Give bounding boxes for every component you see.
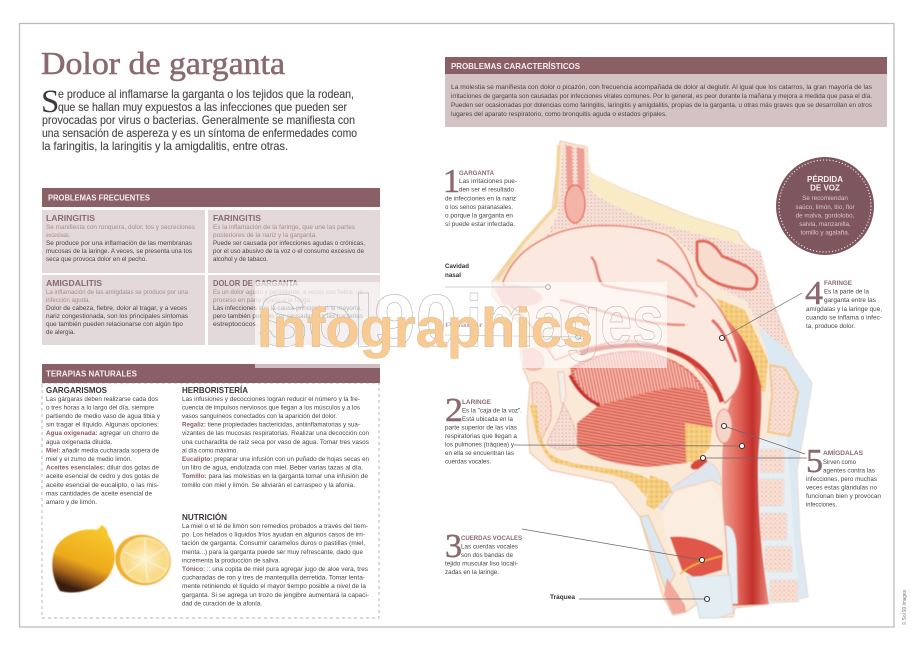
arytenoid band bbox=[725, 525, 738, 604]
text: nutrición: incrementa la producción de saliva. bbox=[182, 557, 280, 564]
text: gargarismos: sin tragar el líquido. Algunas opciones: bbox=[46, 422, 159, 429]
larynx cavity bbox=[662, 482, 723, 575]
text: herboristería: tomillo con miel y limón. Se aliviarán el carraspeo y la afonía. bbox=[182, 482, 355, 489]
teeth bbox=[558, 372, 566, 403]
callout: 4 faringe: garganta entre las bbox=[824, 297, 877, 304]
title: Dolor de garganta bbox=[41, 45, 285, 81]
callout: 1 garganta: den ser el resultado bbox=[459, 187, 514, 194]
callout: 3 cuerdas vocales: CUERDAS VOCALES bbox=[461, 535, 523, 542]
card: dolor de garganta: Las infecciones son la causa principal en la mayoría, bbox=[213, 305, 362, 312]
label: cavidad nasal bbox=[445, 263, 550, 289]
label: tráquea bbox=[550, 594, 710, 602]
circle: pérdida de voz: tomillo y agalaña. bbox=[800, 230, 850, 236]
card: faringitis bbox=[208, 210, 380, 273]
text: nutrición bbox=[182, 511, 369, 607]
callout: 3 cuerdas vocales: zadas en la laringe. bbox=[445, 569, 499, 576]
text box background bbox=[445, 74, 887, 127]
callout: 5 amígdalas: Sirven como bbox=[823, 459, 856, 466]
spine base strip bbox=[756, 436, 800, 604]
heading bar: terapias naturales: TERAPIAS NATURALES bbox=[46, 368, 137, 378]
thyroid cartilage bbox=[640, 515, 675, 590]
body text: lugares del aparato respiratorio, como bronquitis aguda o estados gripales. bbox=[451, 111, 667, 118]
card: amigdalitis: que también pueden relacionarse con algún tipo bbox=[46, 321, 183, 328]
epiglottis bbox=[655, 462, 721, 510]
circle: pérdida de voz: DE VOZ bbox=[810, 184, 840, 192]
text: nutrición: La miel o el té de limón son remedios probados a través del tiem- bbox=[182, 523, 368, 530]
oral cavity tongue bbox=[570, 350, 713, 467]
watermark: images bbox=[466, 281, 664, 362]
red lingual tonsil bbox=[689, 456, 709, 472]
callout: 5 amígdalas: infecciones, pero muchas bbox=[806, 476, 878, 483]
text: nutrición: garganta. Si se agrega un trozo de jengibre aumentará la capaci- bbox=[182, 592, 369, 599]
text: gargarismos: Agua oxigenada: agregar un chorro de bbox=[46, 430, 159, 437]
callout: 1 garganta: o porque la garganta en bbox=[445, 213, 513, 220]
frontal sinus bbox=[565, 185, 585, 223]
lower turbinate fold bbox=[560, 300, 685, 325]
lips bbox=[523, 348, 544, 370]
callout: 2 laringe bbox=[445, 392, 744, 466]
callout: 1 garganta: 1 bbox=[443, 163, 460, 200]
callout: 2 laringe: los pulmones (tráquea) y bbox=[445, 442, 515, 449]
callout: 3 cuerdas vocales: 3 bbox=[445, 528, 462, 565]
text: herboristería: HERBORISTERÍA bbox=[182, 384, 248, 395]
text: gargarismos: o tres horas a lo largo del día, siempre bbox=[46, 404, 154, 412]
vocal cords bbox=[670, 537, 723, 578]
heading bar: problemas frecuentes bbox=[42, 188, 380, 207]
callout: 2 laringe: LARINGE bbox=[462, 399, 492, 406]
panel: problemas frecuentes bbox=[42, 188, 380, 345]
jaw bone bbox=[547, 403, 577, 450]
text: gargarismos: partiendo de medio vaso de agua tibia y bbox=[46, 413, 161, 420]
body text: irritaciones de garganta son causadas por infecciones virales comunes. Por lo general, es peor durante la mañana y mejora a medida que pasa el día. bbox=[451, 93, 872, 100]
callout: 2 laringe: cuerdas vocales. bbox=[445, 459, 491, 466]
card: dolor de garganta: pero también pueden ser causadas por las bacterias bbox=[213, 313, 364, 320]
text: gargarismos: Miel: añadir media cucharada sopera de bbox=[46, 447, 159, 454]
heading bar: problemas característicos bbox=[445, 57, 887, 74]
pharynx fold bbox=[712, 320, 736, 362]
text: herboristería: Regaliz: tiene propiedades bactericidas, antiinflamatorias y sua- bbox=[182, 422, 360, 429]
callout: 1 garganta bbox=[443, 163, 517, 228]
body text bbox=[451, 84, 873, 118]
callout: 5 amígdalas: 5 bbox=[806, 443, 823, 480]
text: gargarismos: GARGARISMOS bbox=[46, 385, 107, 395]
callout: 4 faringe bbox=[720, 275, 882, 340]
text: herboristería: Las infusiones y decocciones logran reducir el número y la fre- bbox=[182, 396, 360, 403]
skin silhouette bbox=[492, 141, 812, 618]
anatomy illustration: sagittal section of head and neck bbox=[492, 141, 812, 618]
callout: 1 garganta: de infecciones en la nariz bbox=[445, 195, 516, 202]
tongue upper fan muscle bbox=[573, 352, 703, 405]
callout: 3 cuerdas vocales bbox=[445, 528, 704, 576]
callout: 4 faringe: 4 bbox=[805, 275, 823, 312]
watermark bbox=[255, 281, 667, 368]
intro text block: la faringitis, la laringitis y la amigdalitis, entre otras. bbox=[42, 140, 288, 153]
text: herboristería: vasos sanguíneos conectados con la aparición del dolor. bbox=[182, 413, 337, 420]
text: nutrición: NUTRICIÓN bbox=[182, 511, 227, 522]
callout: 3 cuerdas vocales: son dos bandas de bbox=[461, 552, 513, 559]
vocal cord fold bbox=[680, 556, 722, 574]
callout: 2 laringe: parte superior de las vías bbox=[445, 425, 518, 432]
circle: pérdida de voz bbox=[776, 157, 874, 255]
lower lip and chin bone bbox=[532, 382, 551, 443]
body text: La molestia se manifiesta con dolor o picazón, con frecuencia acompañada de dolor al deglutir. Al igual que los catarros, la gran mayoría de las bbox=[451, 84, 873, 91]
text: gargarismos: aceite esencial de cedro y dos gotas de bbox=[46, 473, 159, 480]
text: herboristería: al día como máximo. bbox=[182, 447, 238, 454]
label: tráquea: Tráquea bbox=[550, 594, 575, 601]
callout: 5 amígdalas: AMÍGDALAS bbox=[823, 448, 864, 457]
callout: 2 laringe: 2 bbox=[445, 392, 463, 429]
card: amigdalitis: Dolor de cabeza, fiebre, dolor al tragar, y a veces bbox=[46, 305, 188, 312]
forehead and skull bone bbox=[587, 148, 738, 243]
text: herboristería: un litro de agua, endulzada con miel. Beber varias tazas al día. bbox=[182, 465, 363, 472]
heading bar: terapias naturales bbox=[42, 364, 380, 383]
hyoid fat bbox=[646, 475, 672, 510]
callout: 3 cuerdas vocales: tejido muscular liso locali- bbox=[445, 561, 518, 568]
soft palate band bbox=[580, 345, 722, 402]
card: dolor de garganta: Es un dolor agudo y persistente, a veces con fiebre, un bbox=[213, 289, 363, 296]
callout: 4 faringe: amígdalas y la laringe que, bbox=[806, 306, 882, 313]
card: amigdalitis: nariz congestionada, son los principales síntomas bbox=[46, 313, 189, 320]
card: laringitis: mucosas de la laringe. A veces, se presenta una tos bbox=[46, 248, 193, 255]
trachea front wall bbox=[664, 578, 686, 614]
card: faringitis: Es la inflamación de la faringe, que une las partes bbox=[213, 224, 356, 231]
card: faringitis: Puede ser causada por infecciones agudas o crónicas, bbox=[213, 240, 365, 247]
label: cavidad nasal: Cavidad bbox=[445, 263, 469, 270]
speckled cranial bone band bbox=[545, 144, 790, 352]
label: paladar: Paladar bbox=[445, 322, 484, 329]
label: paladar bbox=[445, 322, 580, 339]
circle: pérdida de voz: de malva, gordolobo, bbox=[796, 212, 855, 220]
text: nutrición: mente retiniendo el líquido el mayor tiempo posible a nivel de la bbox=[182, 583, 366, 590]
image: lemons bbox=[52, 525, 177, 592]
callout: 3 cuerdas vocales: Las cuerdas vocales bbox=[461, 544, 519, 551]
panel: terapias naturales bbox=[42, 364, 380, 618]
card: dolor de garganta: proceso en parte ligado a la fatiga. bbox=[213, 297, 312, 304]
text: herboristería: Eucalipto: preparar una infusión con un puñado de hojas secas en bbox=[182, 456, 369, 463]
card: amigdalitis: La inflamación de las amígdalas se produce por una bbox=[46, 289, 188, 296]
watermark: Infographics bbox=[257, 296, 593, 359]
text: herboristería: una cucharadita de raíz seca por vaso de agua. Tomar tres vasos bbox=[182, 439, 370, 446]
credit: © Sol 90 Images bbox=[901, 590, 908, 625]
nasal cavity bbox=[503, 226, 741, 403]
callout: 5 amígdalas: infecciones. bbox=[806, 502, 837, 509]
dashed panel border bbox=[42, 383, 379, 618]
watermark: Sol90 bbox=[258, 281, 457, 362]
callout: 4 faringe: FARINGE bbox=[824, 280, 853, 287]
frontal sinus columns bbox=[566, 146, 585, 190]
intro text block: e produce al inflamarse la garganta o los tejidos que la rodean, bbox=[58, 88, 354, 101]
card: faringitis: posteriores de la nariz y la garganta. bbox=[213, 232, 317, 239]
card: amigdalitis: de alergia. bbox=[46, 329, 75, 336]
text: gargarismos bbox=[46, 385, 161, 506]
card: faringitis: alcohol y de tabaco. bbox=[213, 256, 268, 263]
text: gargarismos: amaro y de limón. bbox=[46, 499, 97, 506]
card: faringitis: por el uso abusivo de la voz o el consumo excesivo de bbox=[213, 248, 364, 255]
text: nutrición: cucharadas de ron y tres de mantequilla derretida. Tomar lenta- bbox=[182, 575, 365, 582]
text: herboristería: Tomillo: para las molestias en la garganta tomar una infusión de bbox=[182, 473, 368, 480]
intro text block: una sensación de aspereza y es un síntoma de enfermedades como bbox=[42, 127, 357, 140]
nasal vestibule fold bbox=[494, 285, 543, 306]
callout: 1 garganta: Las irritaciones pue- bbox=[459, 178, 517, 185]
callout: 5 amígdalas: veces estas glándulas no bbox=[806, 485, 877, 492]
card: amigdalitis: infección aguda. bbox=[46, 297, 90, 304]
card: laringitis: seca que provoca dolor en el pecho. bbox=[46, 256, 147, 263]
callout: 1 garganta: o los senos paranasales, bbox=[445, 204, 513, 211]
callout: 5 amígdalas: agentes contra las bbox=[823, 468, 876, 474]
card: dolor de garganta: DOLOR DE GARGANTA bbox=[213, 278, 298, 288]
body text: Pueden ser ocasionadas por dolencias como faringitis, laringitis y amigdalitis, propias de la garganta, u otras más graves que se desarrollan en otros bbox=[451, 102, 873, 109]
callout: 2 laringe: en ella se encuentran las bbox=[445, 450, 515, 457]
intro text block: provocadas por virus o bacterias. Generalmente se manifiesta con bbox=[42, 114, 355, 127]
callout: 1 garganta: GARGANTA bbox=[459, 170, 494, 177]
intro text block bbox=[41, 84, 357, 153]
text: gargarismos: Aceites esenciales: diluir dos gotas de bbox=[46, 465, 159, 472]
upper turbinate fold bbox=[591, 257, 695, 307]
heading bar: problemas frecuentes: PROBLEMAS FRECUENTES bbox=[48, 192, 150, 202]
text: gargarismos: Las gárgaras deben realizarse cada dos bbox=[46, 396, 159, 403]
text: nutrición: menta...) para la garganta puede ser muy refrescante, dado que bbox=[182, 549, 363, 556]
text: nutrición: tación de garganta. Consumir caramelos duros o pastillas (miel, bbox=[182, 540, 365, 547]
callout: 2 laringe: Está ubicada en la bbox=[462, 416, 513, 423]
text: herboristería bbox=[182, 384, 370, 489]
card: laringitis: Se manifiesta con ronquera, dolor, tos y secreciones bbox=[46, 224, 196, 231]
text: gargarismos: miel y el zumo de medio limón. bbox=[46, 456, 132, 463]
card: amigdalitis: AMIGDALITIS bbox=[46, 278, 102, 288]
text: gargarismos: agua oxigenada diluida. bbox=[46, 439, 112, 446]
text: herboristería: cuencia de impulsos nerviosos que llegan a los músculos y a los bbox=[182, 404, 361, 412]
vertebra bodies bbox=[759, 449, 798, 602]
upper vertebrae bbox=[768, 365, 798, 436]
middle turbinate fold bbox=[657, 260, 697, 297]
circle: pérdida de voz: salvia, manzanilla, bbox=[799, 221, 851, 228]
panel: problemas característicos bbox=[445, 57, 887, 127]
trachea bbox=[687, 575, 733, 618]
text: nutrición: Tónico: :: una copita de miel pura agregar jugo de aloe vera, tres bbox=[182, 566, 369, 573]
intro text block: que se hallan muy expuestos a las infecciones que pueden ser bbox=[58, 101, 347, 114]
yellow fat under jaw bbox=[530, 405, 650, 497]
card: dolor de garganta: estreptococos. bbox=[213, 321, 258, 328]
pre-epiglottic fat bbox=[685, 423, 712, 462]
text: nutrición: dad de curación de la afonía. bbox=[182, 600, 262, 607]
card: laringitis bbox=[42, 210, 205, 273]
callout: 1 garganta: sí puede estar infectada. bbox=[445, 221, 515, 228]
callout: 2 laringe: respiratorias que llegan a bbox=[445, 433, 517, 440]
light blue vertebral ligament bbox=[758, 326, 812, 600]
callout: 5 amígdalas bbox=[700, 424, 881, 509]
label: cavidad nasal: nasal bbox=[445, 272, 461, 279]
nose bridge cartilage strip bbox=[497, 145, 559, 280]
card: dolor de garganta bbox=[208, 275, 380, 345]
card: laringitis: excesivas. bbox=[46, 232, 70, 239]
tongue tip dark curve bbox=[570, 375, 600, 405]
text: nutrición: po. Los helados o líquidos fríos ayudan en algunos casos de irri- bbox=[182, 532, 365, 539]
callout: 4 faringe: Es la parte de la bbox=[824, 288, 869, 296]
sphenoid sinus bbox=[697, 241, 757, 289]
tonsil oval bbox=[716, 409, 732, 443]
circle: pérdida de voz: PÉRDIDA bbox=[807, 175, 843, 184]
text: gargarismos: aceite esencial de eucalipto, o las mis- bbox=[46, 482, 159, 489]
yellow fatty tissue behind pharynx bbox=[716, 298, 768, 392]
callout: 4 faringe: cuando se inflama o infec- bbox=[806, 315, 882, 322]
callout: 4 faringe: ta, produce dolor. bbox=[806, 323, 855, 330]
heading bar: problemas característicos: PROBLEMAS CARACTERÍSTICOS bbox=[451, 60, 580, 71]
card: laringitis: LARINGITIS bbox=[46, 213, 95, 223]
card: amigdalitis bbox=[42, 275, 205, 345]
card: laringitis: Se produce por una inflamación de las membranas bbox=[46, 240, 193, 247]
callout: 2 laringe: Es la "caja de la voz". bbox=[462, 408, 522, 414]
circle: pérdida de voz: Se recomiendan bbox=[802, 195, 848, 202]
posterior pharynx muscle bbox=[718, 312, 769, 606]
circle: pérdida de voz: saúco, limón, tilo, flor bbox=[795, 204, 855, 211]
intro text block: S bbox=[41, 84, 59, 120]
callout: 5 amígdalas: funcionan bien y provocan bbox=[806, 493, 881, 500]
text: herboristería: vizantes de las mucosas respiratorias. Realizar una decocción con bbox=[182, 430, 369, 437]
card: faringitis: FARINGITIS bbox=[213, 213, 261, 223]
text: gargarismos: mas cantidades de aceite esencial de bbox=[46, 490, 152, 497]
